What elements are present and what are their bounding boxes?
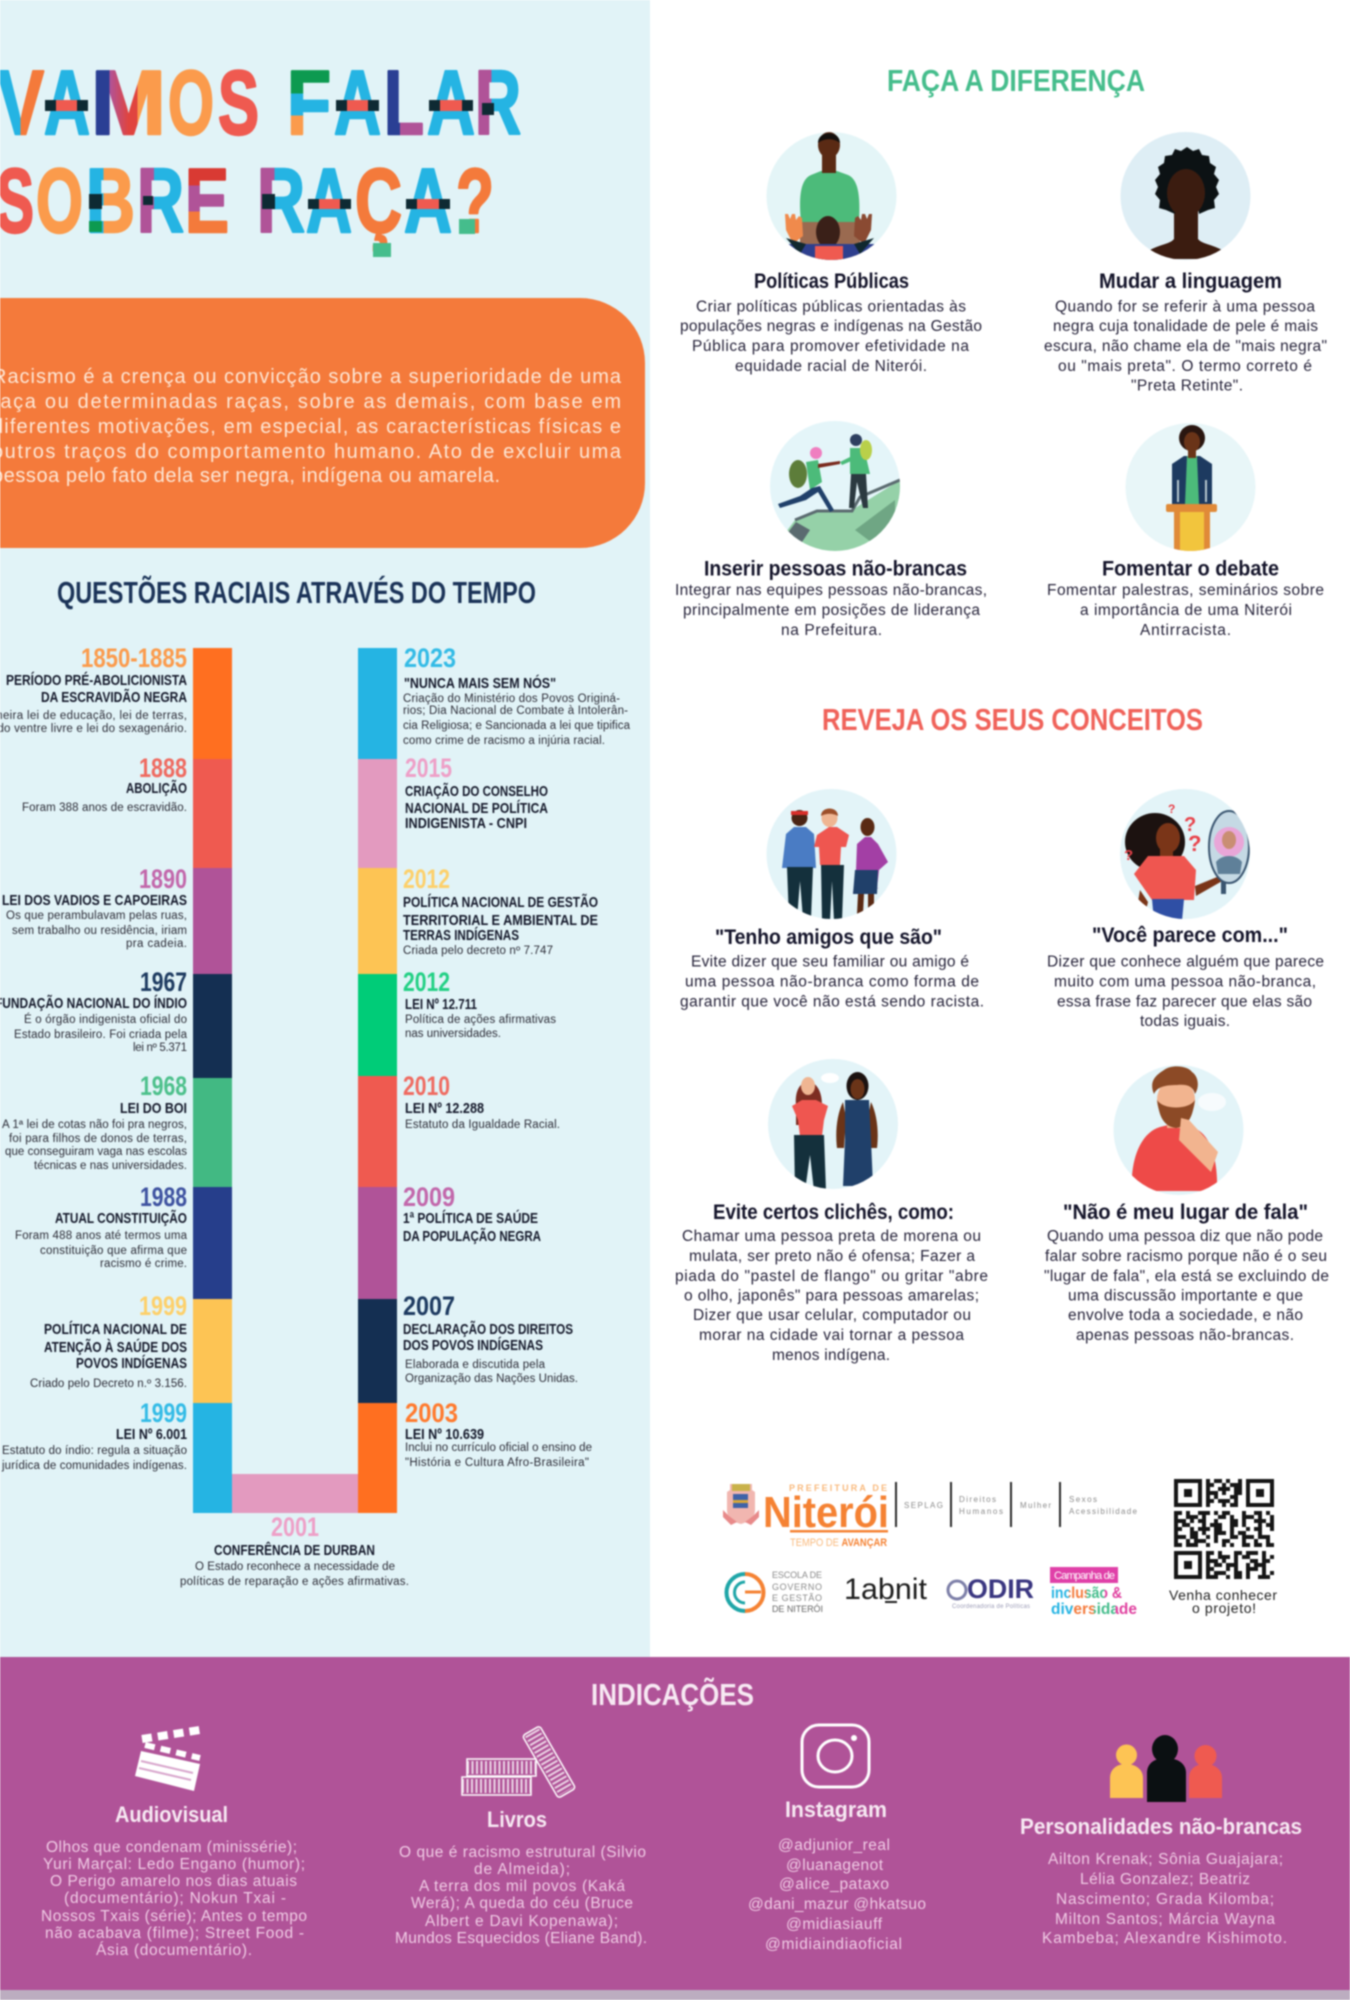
card: mudar a linguagem <box>1044 132 1327 395</box>
icon: woman looking into mirror: ? <box>1184 814 1196 836</box>
timeline entry 1890 <box>2 864 187 950</box>
card: inserir pessoas não-brancas: na Prefeitura. <box>781 622 882 639</box>
card: inserir pessoas não-brancas: principalmente em posições de liderança <box>683 602 980 619</box>
timeline entry 2015: NACIONAL DE POLÍTICA <box>405 800 548 817</box>
column: instagram <box>748 1725 926 1953</box>
card: evite certos clichês: Dizer que usar celular, computador ou <box>693 1307 971 1324</box>
card: não é meu lugar de fala <box>1044 1065 1329 1344</box>
icon: thoughtful bearded man <box>1114 1065 1244 1195</box>
text block: definition: raça ou determinadas raças, sobre as demais, com base em <box>0 391 621 413</box>
icon: woman looking into mirror: ? <box>1168 802 1175 816</box>
timeline entry 2007: DECLARAÇÃO DOS DIREITOS <box>403 1320 573 1338</box>
timeline entry 2003: "História e Cultura Afro-Brasileira" <box>405 1457 589 1469</box>
timeline entry 2010: 2010 <box>403 1071 450 1101</box>
timeline entry 2023: Criação do Ministério dos Povos Originá- <box>403 693 620 705</box>
column: instagram: @adjunior_real <box>778 1837 890 1854</box>
logo: escola de governo: ESCOLA DE <box>772 1570 822 1580</box>
title: O <box>168 53 214 154</box>
timeline entry 1968: que conseguiram vaga nas escolas <box>5 1146 187 1158</box>
column: livros <box>395 1726 647 1947</box>
card: você parece com: Dizer que conhece alguém que parece <box>1047 954 1324 971</box>
column: instagram: @midiaindiaoficial <box>765 1936 902 1953</box>
card: você parece com: "Você parece com..." <box>1092 924 1288 947</box>
icon: three people <box>1110 1735 1222 1802</box>
column: personalidades não-brancas: Ailton Krenak; Sônia Guajajara; <box>1048 1851 1283 1868</box>
logo: secretariats: Humanos <box>959 1507 1003 1516</box>
title: F <box>287 53 331 154</box>
card: evite certos clichês: mulata, ser preto não é ofensa; Fazer a <box>689 1248 975 1265</box>
timeline entry 2012 territorial policy <box>403 864 598 957</box>
column: audiovisual: Audiovisual <box>115 1802 228 1827</box>
title: S <box>218 53 259 154</box>
timeline entry 1988: constituição que afirma que <box>40 1245 187 1257</box>
timeline entry 1967: FUNDAÇÃO NACIONAL DO ÍNDIO <box>0 994 187 1012</box>
timeline entry 1999 health policy <box>30 1291 187 1390</box>
logo: secretariats: Direitos <box>959 1495 996 1504</box>
column: audiovisual: não acabava (filme); Street Food - <box>45 1925 304 1942</box>
timeline entry 2009 <box>403 1182 541 1245</box>
column: audiovisual: O Perigo amarelo nos dias atuais <box>50 1873 297 1890</box>
icon: woman looking into mirror: ? <box>1124 847 1133 864</box>
timeline entry 2007: Organização das Nações Unidas. <box>405 1373 578 1385</box>
card: inserir pessoas não-brancas: Inserir pessoas não-brancas <box>704 558 967 581</box>
panel: racism definition <box>0 298 645 548</box>
timeline entry 2023: 2023 <box>404 643 456 673</box>
column: instagram: @midiasiauff <box>786 1916 883 1933</box>
card: mudar a linguagem: Quando for se referir à uma pessoa <box>1055 298 1315 316</box>
title: O <box>36 151 83 252</box>
logo: campanha de inclusão e diversidade <box>1050 1567 1137 1618</box>
timeline entry 2003: LEI Nº 10.639 <box>405 1426 484 1443</box>
title: L <box>384 53 424 154</box>
timeline entry 2010: Estatuto da Igualdade Racial. <box>405 1119 560 1131</box>
title: R <box>475 53 521 154</box>
timeline entry 2003: 2003 <box>405 1398 458 1428</box>
column: audiovisual: Nossos Txais (série); Antes o tempo <box>41 1908 307 1925</box>
timeline entry 1888: Foram 388 anos de escravidão. <box>22 802 187 814</box>
timeline entry 2012 territorial policy: TERRITORIAL E AMBIENTAL DE <box>403 912 598 929</box>
timeline entry 2023: "NUNCA MAIS SEM NÓS" <box>404 674 556 692</box>
card: políticas públicas <box>680 132 982 375</box>
timeline entry 1999 health policy: ATENÇÃO À SAÚDE DOS <box>44 1338 187 1356</box>
column: personalidades não-brancas: Nascimento; Grada Kilomba; <box>1056 1891 1274 1908</box>
timeline entry 1967: 1967 <box>140 967 187 997</box>
column: instagram: Instagram <box>785 1797 887 1822</box>
icon: instagram <box>802 1725 869 1787</box>
logo: secretariats: Sexos <box>1069 1495 1097 1504</box>
card: fomentar o debate: Antirracista. <box>1140 622 1231 639</box>
card: fomentar o debate: Fomentar o debate <box>1102 558 1279 581</box>
title <box>0 53 521 257</box>
logo: campanha de inclusão e diversidade: diversidade <box>1051 1601 1137 1618</box>
logo: secretariats: SEPLAG <box>904 1501 943 1510</box>
logo: prefeitura de niterói: TEMPO DE AVANÇAR <box>790 1537 887 1549</box>
logo: codir: ODIR <box>967 1574 1034 1604</box>
timeline entry 1968: 1968 <box>140 1071 187 1101</box>
text block: definition: outros traços do comportamento humano. Ato de excluir uma <box>0 441 622 463</box>
card: você parece com: todas iguais. <box>1140 1013 1230 1030</box>
card: mudar a linguagem: ou "mais preta". O termo correto é <box>1058 358 1312 375</box>
timeline entry 2001: O Estado reconhece a necessidade de <box>195 1561 395 1573</box>
text: venha conhecer: o projeto! <box>1192 1600 1256 1616</box>
timeline entry 2015: INDIGENISTA - CNPI <box>405 815 527 832</box>
card: mudar a linguagem: "Preta Retinte". <box>1131 378 1243 395</box>
icon: books <box>462 1726 576 1798</box>
card: evite certos clichês: Chamar uma pessoa preta de morena ou <box>682 1228 981 1245</box>
timeline entry 1988: ATUAL CONSTITUIÇÃO <box>55 1209 187 1227</box>
qr code <box>1174 1481 1274 1577</box>
timeline entry 1967 <box>0 967 188 1054</box>
icon: two women talking <box>768 1059 898 1191</box>
card: evite certos clichês <box>675 1059 988 1364</box>
timeline entry 1888 <box>22 753 187 814</box>
timeline entry 2007: 2007 <box>403 1291 455 1321</box>
card: tenho amigos que são: "Tenho amigos que são" <box>715 926 942 949</box>
timeline entry 1999 health policy: POLÍTICA NACIONAL DE <box>44 1321 187 1338</box>
text block: definition: diferentes motivações, em especial, as características físicas e <box>0 416 621 438</box>
column: livros: Albert e Davi Kopenawa); <box>425 1913 618 1930</box>
card: não é meu lugar de fala: Quando uma pessoa diz que não pode <box>1047 1228 1323 1245</box>
icon: woman at lectern <box>1126 423 1256 553</box>
card: fomentar o debate: Fomentar palestras, seminários sobre <box>1047 582 1324 599</box>
column: livros: O que é racismo estrutural (Silvio <box>399 1844 646 1861</box>
icon: climbers helping each other <box>765 421 900 560</box>
title: A <box>334 53 381 154</box>
logo: secretariats: Mulher <box>1020 1501 1051 1510</box>
text: venha conhecer: Venha conhecer <box>1169 1587 1277 1603</box>
title: ? <box>456 151 494 252</box>
timeline entry 1890: sem trabalho ou residência, iriam <box>12 925 187 937</box>
text block: definition: pessoa pelo fato dela ser negra, indígena ou amarela. <box>0 465 500 487</box>
logo: campanha de inclusão e diversidade: Campanha de <box>1054 1570 1115 1582</box>
timeline entry 1999 health policy: Criado pelo Decreto n.º 3.156. <box>30 1378 187 1390</box>
timeline entry 1888: ABOLIÇÃO <box>126 779 187 797</box>
card: políticas públicas: equidade racial de Niterói. <box>735 358 927 375</box>
timeline entry 2015: 2015 <box>405 753 452 783</box>
timeline entry 1850-1885: 1850-1885 <box>81 643 187 673</box>
panel: left light-blue column <box>0 0 650 1658</box>
timeline entry 1850-1885: DA ESCRAVIDÃO NEGRA <box>41 688 187 706</box>
timeline entry 1968: técnicas e nas universidades. <box>34 1160 187 1172</box>
logo: escola de governo: DE NITERÓI <box>772 1604 823 1614</box>
heading: faça a diferença: FAÇA A DIFERENÇA <box>887 63 1145 98</box>
card: evite certos clichês: Evite certos clichês, como: <box>713 1201 954 1224</box>
column: personalidades não-brancas: Personalidades não-brancas <box>1020 1814 1302 1839</box>
title: A <box>427 53 475 154</box>
title: B <box>86 151 135 252</box>
timeline entry 1968: foi para filhos de donos de terras, <box>9 1133 187 1145</box>
timeline entry 2001 <box>180 1512 409 1588</box>
timeline entry 1988: Foram 488 anos até termos uma <box>15 1230 188 1242</box>
icon: woman silhouette <box>1120 132 1250 260</box>
card: tenho amigos que são: Evite dizer que seu familiar ou amigo é <box>691 954 969 971</box>
icon: three friends <box>766 789 896 921</box>
card: mudar a linguagem: Mudar a linguagem <box>1099 270 1282 293</box>
timeline entry 2009: 2009 <box>403 1182 455 1212</box>
timeline entry 1988 <box>15 1182 188 1270</box>
timeline entry 1999 law: jurídica de comunidades indígenas. <box>1 1460 187 1472</box>
timeline entry 2009: DA POPULAÇÃO NEGRA <box>403 1227 541 1245</box>
card: evite certos clichês: o olho, japonês" para pessoas amarelas; <box>684 1288 979 1304</box>
timeline entry 1968: LEI DO BOI <box>120 1100 187 1117</box>
timeline entry 1967: Estado brasileiro. Foi criada pela <box>14 1029 188 1041</box>
timeline entry 1999 law: LEI Nº 6.001 <box>116 1426 187 1443</box>
timeline entry 2023: rios; Dia Nacional de Combate à Intolerân- <box>403 705 628 717</box>
card: fomentar o debate: a importância de uma Niterói <box>1080 602 1292 619</box>
heading: timeline: QUESTÕES RACIAIS ATRAVÉS DO TEMPO <box>57 574 536 610</box>
card: políticas públicas: Criar políticas públicas orientadas às <box>696 298 966 316</box>
card: evite certos clichês: piada do "pastel de flango" ou gritar "abre <box>675 1268 988 1285</box>
text block: definition <box>0 366 622 487</box>
title: A <box>44 53 90 154</box>
logo: prefeitura de niterói <box>763 1483 889 1549</box>
logo: escola de governo: E GESTÃO <box>772 1593 822 1603</box>
card: não é meu lugar de fala: "lugar de fala", ela está se excluindo de <box>1044 1268 1329 1285</box>
timeline entry 1890: Os que perambulavam pelas ruas, <box>6 910 187 922</box>
timeline entry 2015 <box>405 753 548 832</box>
heading: reveja os seus conceitos: REVEJA OS SEUS CONCEITOS <box>822 702 1203 737</box>
timeline entry 2007 <box>403 1291 578 1385</box>
column: instagram: @dani_mazur @hkatsuo <box>748 1896 926 1913</box>
title: A <box>306 151 352 252</box>
logo: escola de governo: GOVERNO <box>772 1582 822 1592</box>
icon: clapperboard <box>135 1730 200 1791</box>
text block: definition: Racismo é a crença ou convicção sobre a superioridade de uma <box>0 366 622 388</box>
timeline entry 2001: 2001 <box>271 1512 319 1542</box>
logos: partners <box>723 1481 1277 1618</box>
card: evite certos clichês: morar na cidade vai tornar a pessoa <box>699 1327 964 1344</box>
card: mudar a linguagem: escura, não chame ela de "mais negra" <box>1044 338 1327 355</box>
card: mudar a linguagem: negra cuja tonalidade de pele é mais <box>1053 318 1318 335</box>
timeline entry 1999 law: Estatuto do índio: regula a situação <box>2 1445 187 1457</box>
column: livros: Mundos Esquecidos (Eliane Band). <box>395 1930 647 1947</box>
column: personalidades não-brancas: Milton Santos; Márcia Wayna <box>1055 1911 1275 1928</box>
card: tenho amigos que são: uma pessoa não-branca como forma de <box>685 974 979 991</box>
timeline entry 1999 health policy: 1999 <box>139 1291 187 1321</box>
card: não é meu lugar de fala: apenas pessoas não-brancas. <box>1076 1327 1294 1344</box>
column: livros: A terra dos mil povos (Kaká <box>419 1878 625 1895</box>
logo: coat of arms <box>723 1484 759 1525</box>
card: não é meu lugar de fala: uma discussão importante e que <box>1068 1288 1303 1304</box>
card: você parece com: muito com uma pessoa não-branca, <box>1054 974 1316 991</box>
timeline entry 2023: como crime de racismo a injúria racial. <box>403 735 605 747</box>
logo: codir: Coordenadoria de Políticas <box>952 1604 1030 1610</box>
card: políticas públicas: populações negras e indígenas na Gestão <box>680 318 982 335</box>
timeline entry 2012 law: nas universidades. <box>405 1028 501 1040</box>
column: instagram: @luanagenot <box>786 1857 884 1874</box>
card: não é meu lugar de fala: envolve toda a sociedade, e não <box>1068 1307 1303 1324</box>
timeline entry 2012 law: 2012 <box>403 967 450 997</box>
timeline entry 2012 territorial policy: TERRAS INDÍGENAS <box>403 927 519 944</box>
column: audiovisual: Yuri Marçal: Ledo Engano (humor); <box>43 1856 305 1873</box>
timeline entry 2007: DOS POVOS INDÍGENAS <box>403 1337 543 1354</box>
card: você parece com <box>1047 789 1324 1030</box>
column: personalidades não-brancas: Kambeba; Alexandre Kishimoto. <box>1042 1930 1287 1947</box>
panel: indicações <box>0 1657 1350 2000</box>
timeline entry 1890: LEI DOS VADIOS E CAPOEIRAS <box>2 892 187 909</box>
title: E <box>185 151 229 252</box>
timeline entry 2001: CONFERÊNCIA DE DURBAN <box>214 1541 375 1559</box>
card: políticas públicas: Pública para promover efetividade na <box>692 338 969 355</box>
card: políticas públicas: Políticas Públicas <box>754 270 909 293</box>
timeline entry 2012 law: LEI Nº 12.711 <box>405 996 477 1013</box>
timeline entry 1968 <box>2 1071 187 1172</box>
card: evite certos clichês: menos indígena. <box>772 1347 890 1364</box>
timeline entry 1890: pra cadeia. <box>126 938 187 950</box>
timeline entry 1988: 1988 <box>140 1182 187 1212</box>
card: tenho amigos que são <box>680 789 984 1010</box>
icon: woman looking into mirror: ? <box>1188 831 1201 856</box>
title: Ç <box>355 151 402 252</box>
timeline entry 1999 law <box>1 1398 187 1472</box>
card: fomentar o debate <box>1047 423 1324 639</box>
timeline entry 2012 law <box>403 967 556 1040</box>
timeline entry 2007: Elaborada e discutida pela <box>405 1359 546 1371</box>
card: inserir pessoas não-brancas <box>675 421 987 639</box>
timeline entry 2001: políticas de reparação e ações afirmativas. <box>180 1576 409 1588</box>
logo: prefeitura de niterói: PREFEITURA DE <box>789 1483 887 1493</box>
timeline entry 2003 <box>405 1398 592 1469</box>
card: não é meu lugar de fala: "Não é meu lugar de fala" <box>1063 1201 1308 1224</box>
column: livros: Werá); A queda do céu (Bruce <box>411 1895 633 1912</box>
column: personalidades não-brancas <box>1020 1735 1302 1947</box>
timeline entry 2023: cia Religiosa; e Sancionada a lei que tipifica <box>403 720 631 732</box>
card: tenho amigos que são: garantir que você não está sendo racista. <box>680 993 984 1010</box>
logo: campanha de inclusão e diversidade: inclusão & <box>1051 1585 1122 1602</box>
timeline entry 1999 law: 1999 <box>140 1398 187 1428</box>
timeline entry 2012 law: Política de ações afirmativas <box>405 1014 556 1026</box>
heading: indicações: INDICAÇÕES <box>591 1676 754 1712</box>
timeline entry 2015: CRIAÇÃO DO CONSELHO <box>405 782 548 800</box>
timeline entry 2012 territorial policy: Criada pelo decreto nº 7.747 <box>403 945 553 957</box>
logo: codir <box>948 1574 1034 1610</box>
timeline entry 1850-1885: PERÍODO PRÉ-ABOLICIONISTA <box>6 672 187 689</box>
timeline entry 1888: 1888 <box>139 753 187 783</box>
timeline entry 2010 <box>403 1071 560 1131</box>
title: R <box>257 151 305 252</box>
timeline entry 1890: 1890 <box>139 864 187 894</box>
column: audiovisual: Olhos que condenam (minissérie); <box>46 1839 297 1856</box>
logo: labnit: 1abnit <box>844 1573 928 1606</box>
timeline entry 2009: 1ª POLÍTICA DE SAÚDE <box>403 1209 538 1227</box>
timeline entry 2003: Inclui no currículo oficial o ensino de <box>405 1442 592 1454</box>
timeline entry 2023 <box>403 643 631 747</box>
column: personalidades não-brancas: Lélia Gonzalez; Beatriz <box>1080 1871 1250 1888</box>
logo: escola de governo <box>726 1570 823 1614</box>
column: audiovisual: Ásia (documentário). <box>96 1942 252 1959</box>
text: venha conhecer <box>1169 1587 1277 1616</box>
card: não é meu lugar de fala: falar sobre racismo porque não é o seu <box>1045 1248 1327 1265</box>
column: audiovisual: (documentário); Nokun Txai - <box>64 1890 286 1907</box>
timeline entry 2010: LEI Nº 12.288 <box>405 1100 484 1117</box>
title: A <box>404 151 452 252</box>
timeline entry 1968: A 1ª lei de cotas não foi pra negros, <box>2 1119 187 1131</box>
logo: prefeitura de niterói: Niterói <box>763 1488 889 1537</box>
column: livros: de Almeida); <box>474 1861 570 1878</box>
title: R <box>137 151 184 252</box>
card: inserir pessoas não-brancas: Integrar nas equipes pessoas não-brancas, <box>675 582 987 599</box>
column: livros: Livros <box>487 1807 547 1832</box>
logo: secretariats <box>896 1482 1138 1527</box>
timeline entry 1988: racismo é crime. <box>100 1258 187 1270</box>
column: instagram: @alice_pataxo <box>779 1876 889 1893</box>
logo: secretariats: Acessibilidade <box>1069 1507 1138 1516</box>
timeline entry 1967: lei nº 5.371 <box>133 1042 187 1054</box>
timeline entry 2012 territorial policy: 2012 <box>403 864 450 894</box>
icon: man and raised hands <box>766 132 896 262</box>
timeline entry 2012 territorial policy: POLÍTICA NACIONAL DE GESTÃO <box>403 893 598 911</box>
icon: woman looking into mirror <box>1120 789 1250 921</box>
column: audiovisual <box>41 1730 307 1959</box>
title: M <box>91 53 166 154</box>
card: você parece com: essa frase faz parecer que elas são <box>1057 993 1312 1010</box>
chart: timeline bars <box>193 648 397 1513</box>
timeline entry 1967: É o órgão indigenista oficial do <box>24 1013 187 1026</box>
timeline entry 1850-1885 <box>0 643 187 735</box>
timeline entry 1999 health policy: POVOS INDÍGENAS <box>76 1355 187 1372</box>
